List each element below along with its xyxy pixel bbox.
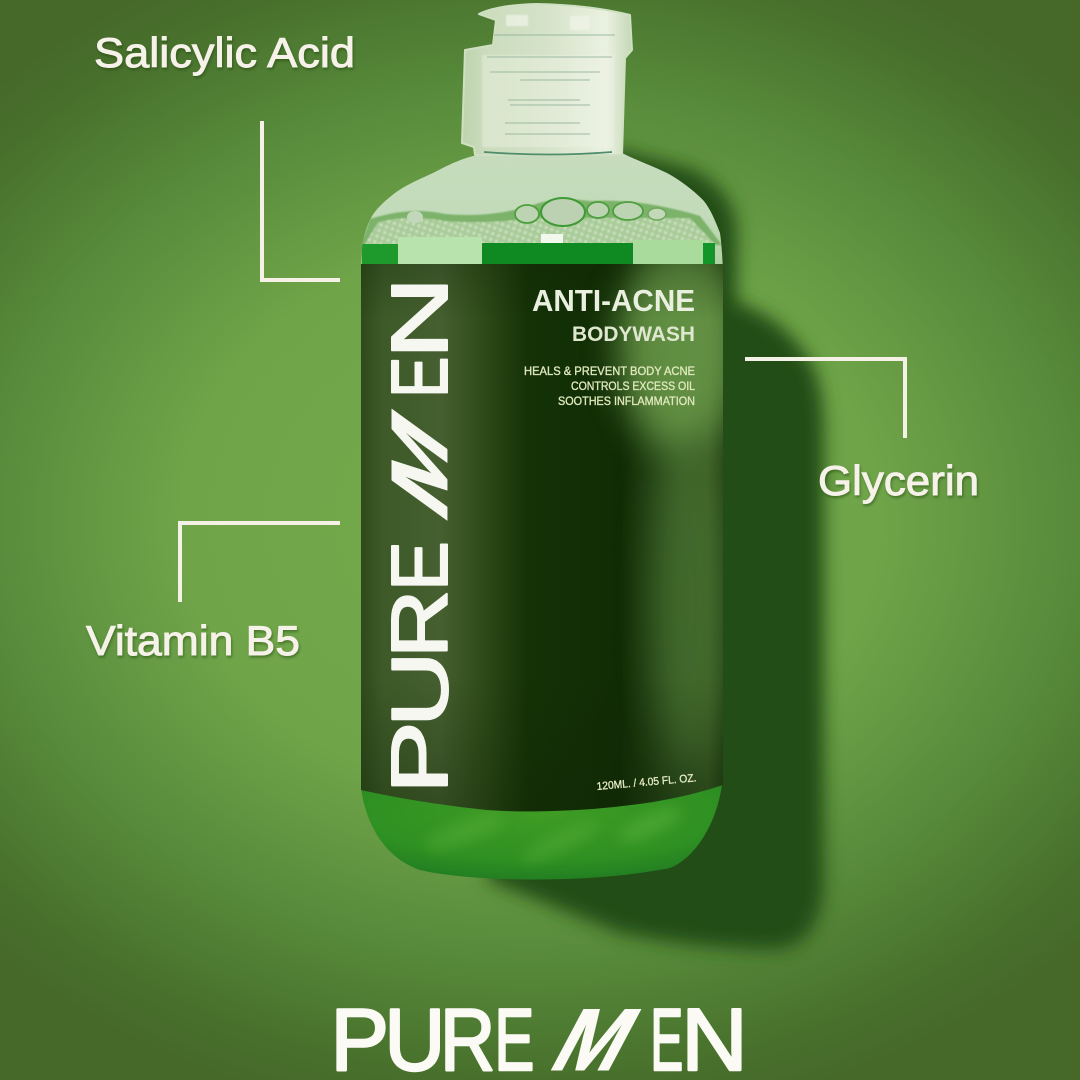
label logo: PURE MEN vertical: N xyxy=(375,277,465,359)
label logo: PURE MEN vertical: E xyxy=(375,357,465,398)
benefits list: SOOTHES INFLAMMATION xyxy=(558,394,695,408)
label logo: PURE MEN vertical xyxy=(375,277,465,794)
bottle shoulder xyxy=(361,153,723,270)
footer logo: PURE MEN xyxy=(330,990,748,1080)
leader line xyxy=(180,523,340,602)
heading: Glycerin: Glycerin xyxy=(818,457,979,504)
bottle shadow xyxy=(487,148,824,950)
label logo: PURE MEN vertical: M xyxy=(376,391,465,540)
benefits list: CONTROLS EXCESS OIL xyxy=(571,379,695,393)
label logo: PURE MEN vertical: R xyxy=(375,590,465,658)
product title: ANTI-ACNE xyxy=(532,283,695,318)
bottle label xyxy=(361,240,742,814)
leader line xyxy=(745,359,905,438)
heading: Vitamin B5: Vitamin B5 xyxy=(86,617,300,664)
label logo: PURE MEN vertical: E xyxy=(375,541,465,591)
label logo: PURE MEN vertical: P xyxy=(375,721,465,794)
foam and liquid xyxy=(361,198,722,264)
callout: Glycerin xyxy=(745,359,979,504)
benefits list: HEALS & PREVENT BODY ACNE xyxy=(524,364,695,378)
label logo: PURE MEN vertical: U xyxy=(375,651,465,727)
leader line xyxy=(262,121,340,280)
benefits list xyxy=(524,364,695,408)
product subtitle: BODYWASH xyxy=(572,322,695,346)
bottle cap xyxy=(462,4,632,155)
callout: Vitamin B5 xyxy=(86,523,340,664)
heading: Salicylic Acid: Salicylic Acid xyxy=(94,29,355,76)
bottle xyxy=(361,4,742,880)
bottle base liquid xyxy=(361,785,722,880)
volume text: 120ML. / 4.05 FL. OZ. xyxy=(596,772,697,793)
callout: Salicylic Acid xyxy=(94,29,355,280)
